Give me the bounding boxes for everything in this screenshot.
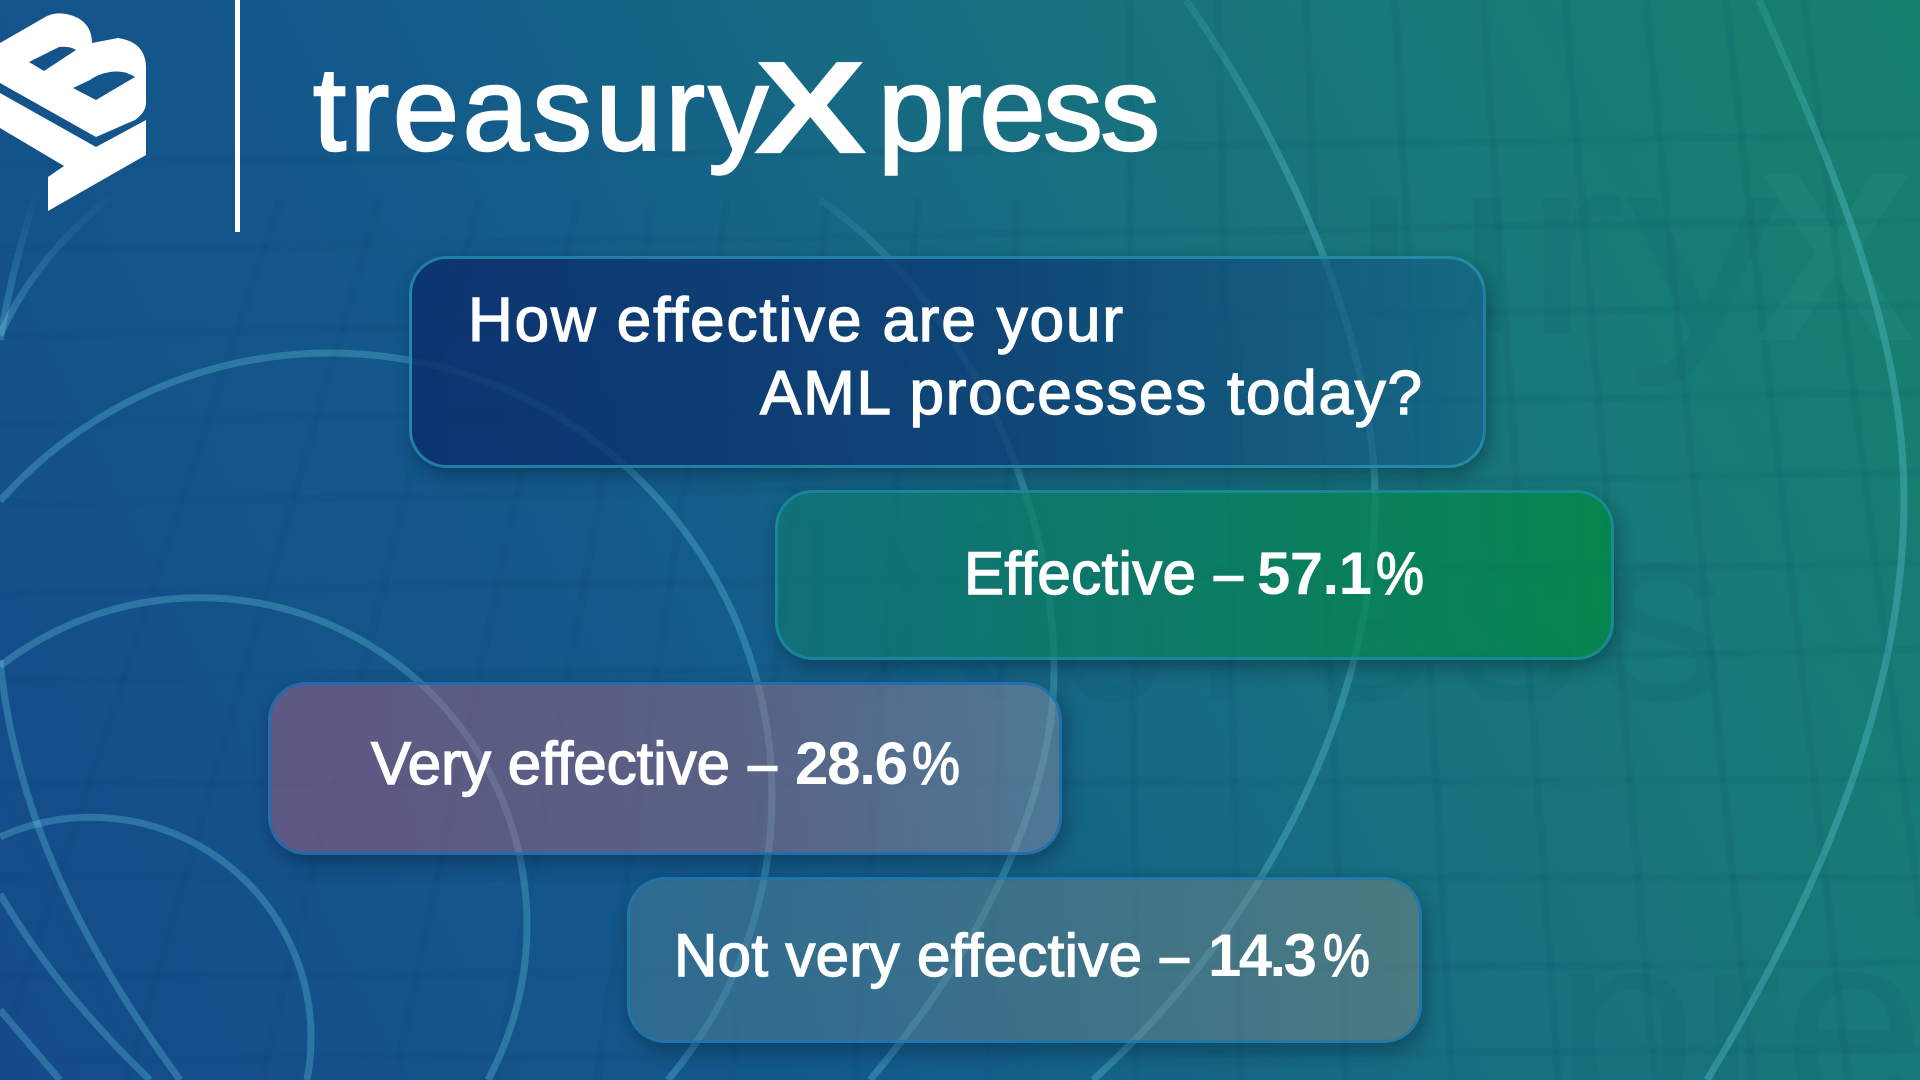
result label: Effective 57.1%: Effective xyxy=(964,540,1196,607)
result label: Very effective 28.6% xyxy=(371,730,960,797)
icon: YB logo mark xyxy=(0,13,146,211)
result label: Very effective 28.6%: – xyxy=(748,730,778,797)
result label: Not very effective 14.3%: 14.3 xyxy=(1208,922,1317,989)
panel: not very effective result xyxy=(627,877,1422,1043)
background watermark wordmark: Xpress xyxy=(844,469,1727,755)
background watermark wordmark xyxy=(844,102,1915,755)
result label: Not very effective 14.3%: % xyxy=(1323,922,1370,989)
question text xyxy=(468,286,1422,428)
result label: Not very effective 14.3%: – xyxy=(1160,922,1190,989)
logo wordmark: treasuryXpress: press xyxy=(878,43,1160,176)
panel: very effective result xyxy=(268,682,1062,855)
result label: Not very effective 14.3%: Not very effective xyxy=(674,922,1142,989)
result label: Very effective 28.6%: Very effective xyxy=(371,730,730,797)
background watermark wordmark: ury xyxy=(1350,102,1780,388)
result label: Effective 57.1%: – xyxy=(1214,540,1244,607)
logo wordmark: treasuryXpress: treasury xyxy=(313,43,768,176)
panel: effective result xyxy=(775,490,1614,660)
logo wordmark: treasuryXpress: X xyxy=(753,34,867,181)
result label: Very effective 28.6%: 28.6 xyxy=(795,730,908,797)
header divider line xyxy=(235,0,240,232)
question text: How effective are your xyxy=(468,286,1123,355)
result label: Very effective 28.6%: % xyxy=(912,730,960,797)
logo wordmark: treasuryXpress xyxy=(313,34,1160,181)
question text: AML processes today? xyxy=(760,359,1422,428)
panel: question xyxy=(409,256,1486,468)
result label: Effective 57.1%: % xyxy=(1376,540,1424,607)
result label: Not very effective 14.3% xyxy=(674,922,1370,989)
background watermark wordmark: X xyxy=(1755,123,1915,391)
result label: Effective 57.1% xyxy=(964,540,1424,607)
result label: Effective 57.1%: 57.1 xyxy=(1257,540,1372,607)
